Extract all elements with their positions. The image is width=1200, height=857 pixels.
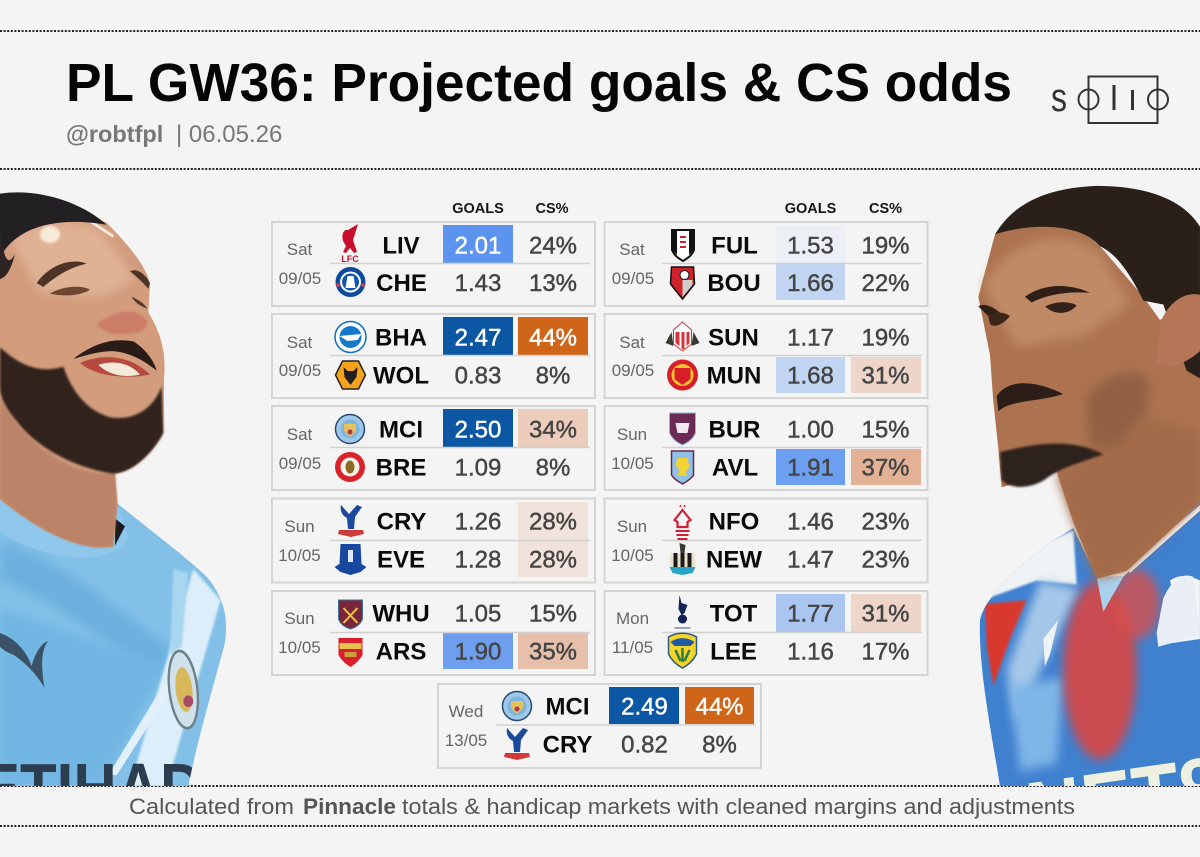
column headers: left: GOALS <box>452 201 504 217</box>
team row: NFO: NFO <box>709 508 759 536</box>
team row: CHE: 13% <box>529 270 577 297</box>
crest: Burnley <box>670 413 696 445</box>
team row: MCI <box>546 694 744 720</box>
team row: MUN: 31% <box>861 362 910 390</box>
team row: LIV: 24% <box>529 232 577 260</box>
match date <box>611 517 654 565</box>
crest: Wolves <box>336 361 366 389</box>
panel: BUR v AVL <box>604 406 928 490</box>
panel: WHU v ARS <box>272 591 595 675</box>
team row: BUR: BUR <box>708 416 760 444</box>
team row: TOT: TOT <box>710 600 758 628</box>
team row: MUN: 1.68 <box>787 362 834 390</box>
match date: 09/05 <box>279 269 321 288</box>
team row: SUN: 1.17 <box>787 324 834 352</box>
team row: CHE <box>376 270 577 297</box>
team row: CRY <box>543 732 737 758</box>
column headers: right <box>785 201 902 217</box>
team row: ARS: 1.90 <box>455 638 501 666</box>
team row: LIV: 2.01 <box>455 232 501 260</box>
team row: CHE: CHE <box>376 270 427 297</box>
team row: BOU <box>707 270 910 297</box>
panel: LIV v CHE <box>272 222 595 306</box>
team row: WOL <box>373 362 570 390</box>
panel: TOT v LEE <box>604 591 928 675</box>
crest: Man City <box>502 692 532 720</box>
match date: Sun <box>617 517 647 536</box>
team row: CRY: CRY <box>543 732 592 758</box>
team row: NFO: 23% <box>861 508 910 536</box>
match date: Sun <box>284 517 315 536</box>
team row: LIV: LIV <box>382 232 420 260</box>
logo: solio: s <box>1051 76 1067 120</box>
team row: BOU: 22% <box>861 270 910 297</box>
team row: EVE <box>377 546 577 574</box>
footer note: Pinnacle <box>303 794 396 819</box>
crest: Crystal Palace <box>338 505 364 537</box>
team row: ARS <box>376 638 577 666</box>
team row: MCI: MCI <box>546 694 590 720</box>
team row: AVL <box>712 454 910 482</box>
team row: AVL: 37% <box>861 454 910 482</box>
crest: Everton <box>334 544 366 575</box>
team row: CRY: 8% <box>702 732 737 758</box>
player photo: right, Crystal Palace <box>978 186 1200 786</box>
panel: BHA v WOL <box>272 314 595 398</box>
match date: Sat <box>619 240 645 259</box>
column headers: right: GOALS <box>785 201 837 217</box>
team row: SUN: SUN <box>708 324 759 352</box>
team row: SUN <box>708 324 910 352</box>
crest: Newcastle <box>670 543 696 575</box>
crest: Bournemouth <box>670 267 694 299</box>
team row: MUN <box>707 362 910 390</box>
match date: 10/05 <box>611 454 654 473</box>
team row: BHA <box>375 324 577 352</box>
team row: BRE <box>376 454 570 482</box>
match date: Sun <box>284 609 315 628</box>
match date: Sat <box>287 333 313 352</box>
match date: Mon <box>616 609 649 628</box>
team row: NEW <box>706 546 910 574</box>
team row: CRY <box>377 508 577 536</box>
team row: LIV <box>382 232 577 260</box>
match date <box>279 425 321 473</box>
match date <box>611 425 654 473</box>
crest: Liverpool <box>341 224 359 264</box>
team row: NEW: 1.47 <box>787 546 834 574</box>
match date <box>279 333 321 380</box>
team row: LEE <box>710 638 910 666</box>
team row: NFO: 1.46 <box>787 508 834 536</box>
team row: TOT: 31% <box>861 600 910 628</box>
panel: NFO v NEW <box>604 498 928 582</box>
team row: FUL: FUL <box>711 232 758 260</box>
match date: Wed <box>449 702 483 721</box>
crest: Liverpool: LFC <box>341 254 359 264</box>
team row: TOT: 1.77 <box>787 600 834 628</box>
team row: MCI: 2.50 <box>455 416 501 444</box>
team row: WHU: 1.05 <box>455 600 501 628</box>
team row: FUL: 1.53 <box>787 232 834 260</box>
team row: MCI: MCI <box>379 416 423 444</box>
team row: CHE: 1.43 <box>455 270 501 297</box>
team row: WOL: 0.83 <box>455 362 501 390</box>
team row: MUN: MUN <box>707 362 761 390</box>
team row: AVL: 1.91 <box>787 454 834 482</box>
match date <box>612 240 654 288</box>
match date: Sat <box>287 425 313 444</box>
match date: 13/05 <box>445 731 487 750</box>
match date: 10/05 <box>611 546 654 565</box>
team row: BOU: 1.66 <box>787 270 834 297</box>
team row: CRY: CRY <box>377 508 426 536</box>
team row: WOL: 8% <box>536 362 570 390</box>
team row: EVE: 1.28 <box>455 546 501 574</box>
crest: Brentford <box>335 452 365 482</box>
footer note: totals & handicap markets with cleaned margins and adjustments <box>402 794 1075 819</box>
team row: SUN: 19% <box>861 324 910 352</box>
crest: West Ham <box>338 600 362 629</box>
crest: Chelsea <box>336 267 366 297</box>
crest: Nottingham Forest <box>674 505 690 539</box>
footer note <box>129 794 1075 819</box>
match date <box>612 333 654 380</box>
footer note: Calculated from <box>129 794 294 819</box>
crest: Brighton <box>335 322 366 352</box>
crest: Arsenal <box>338 638 362 667</box>
match date: 11/05 <box>612 638 653 657</box>
column headers: left <box>452 201 569 217</box>
team row: WHU <box>372 600 577 628</box>
team row: LEE: 1.16 <box>787 638 834 666</box>
match date: 09/05 <box>612 361 654 380</box>
team row: EVE: EVE <box>377 546 425 574</box>
match date: 09/05 <box>279 361 321 380</box>
panel: MCI v BRE <box>272 406 595 490</box>
match date <box>279 240 321 288</box>
team row: FUL: 19% <box>861 232 910 260</box>
match date: 10/05 <box>278 638 321 657</box>
team row: ARS: ARS <box>376 638 426 666</box>
team row: MCI <box>379 416 577 444</box>
crest: Man City <box>336 414 364 444</box>
team row: CRY: 1.26 <box>455 508 501 536</box>
match date <box>445 702 487 750</box>
team row: ARS: 35% <box>529 638 577 666</box>
match date: 09/05 <box>279 454 321 473</box>
panel: MCI v CRY (Wed) <box>438 684 761 768</box>
team row: BRE: BRE <box>376 454 426 482</box>
match date <box>278 609 321 657</box>
match date <box>612 609 653 657</box>
team row: BHA: 2.47 <box>455 324 501 352</box>
team row: NFO <box>709 508 910 536</box>
team row: NEW: 23% <box>861 546 910 574</box>
player photo: left, Man City <box>0 192 226 827</box>
team row: AVL: AVL <box>712 454 758 482</box>
team row: BUR <box>708 416 910 444</box>
crest: Sunderland <box>666 322 700 351</box>
match date: 09/05 <box>612 269 654 288</box>
team row: BRE: 8% <box>536 454 570 482</box>
match date <box>278 517 321 565</box>
team row: CRY: 28% <box>529 508 577 536</box>
crest: Leeds <box>668 633 696 668</box>
team row: EVE: 28% <box>529 546 577 574</box>
team row: BRE: 1.09 <box>455 454 501 482</box>
team row: WHU: 15% <box>529 600 577 628</box>
team row: WOL: WOL <box>373 362 429 390</box>
match date: Sat <box>287 240 313 259</box>
team row: CRY: 0.82 <box>621 732 668 758</box>
match date: 10/05 <box>278 546 321 565</box>
match date: Sat <box>619 333 645 352</box>
panel: CRY v EVE <box>272 498 595 582</box>
crest: Tottenham <box>674 595 690 628</box>
team row: TOT <box>710 600 910 628</box>
team row: FUL <box>711 232 910 260</box>
team row: LEE: LEE <box>710 638 757 666</box>
team row: BUR: 1.00 <box>787 416 834 444</box>
panel: FUL v BOU <box>604 222 928 306</box>
team row: WHU: WHU <box>372 600 430 628</box>
column headers: left: CS% <box>535 201 569 217</box>
crest: Crystal Palace <box>504 728 530 760</box>
crest: Aston Villa <box>672 451 694 484</box>
team row: BUR: 15% <box>861 416 910 444</box>
title: PL GW36: Projected goals & CS odds <box>66 53 1012 113</box>
team row: BHA: BHA <box>375 324 427 352</box>
team row: MCI: 44% <box>695 694 744 720</box>
team row: BHA: 44% <box>529 324 577 352</box>
column headers: right: CS% <box>869 201 902 217</box>
subtitle: author and date: | 06.05.26 <box>176 121 282 148</box>
team row: LEE: 17% <box>861 638 910 666</box>
team row: MCI: 2.49 <box>621 694 668 720</box>
crest: Man United <box>667 360 698 390</box>
team row: MCI: 34% <box>529 416 577 444</box>
subtitle: author and date: @robtfpl <box>66 121 163 147</box>
match date: Sun <box>617 425 647 444</box>
logo: solio <box>1051 76 1168 123</box>
team row: BOU: BOU <box>707 270 761 297</box>
panel: SUN v MUN <box>604 314 928 398</box>
crest: Fulham <box>672 230 694 261</box>
team row: NEW: NEW <box>706 546 762 574</box>
